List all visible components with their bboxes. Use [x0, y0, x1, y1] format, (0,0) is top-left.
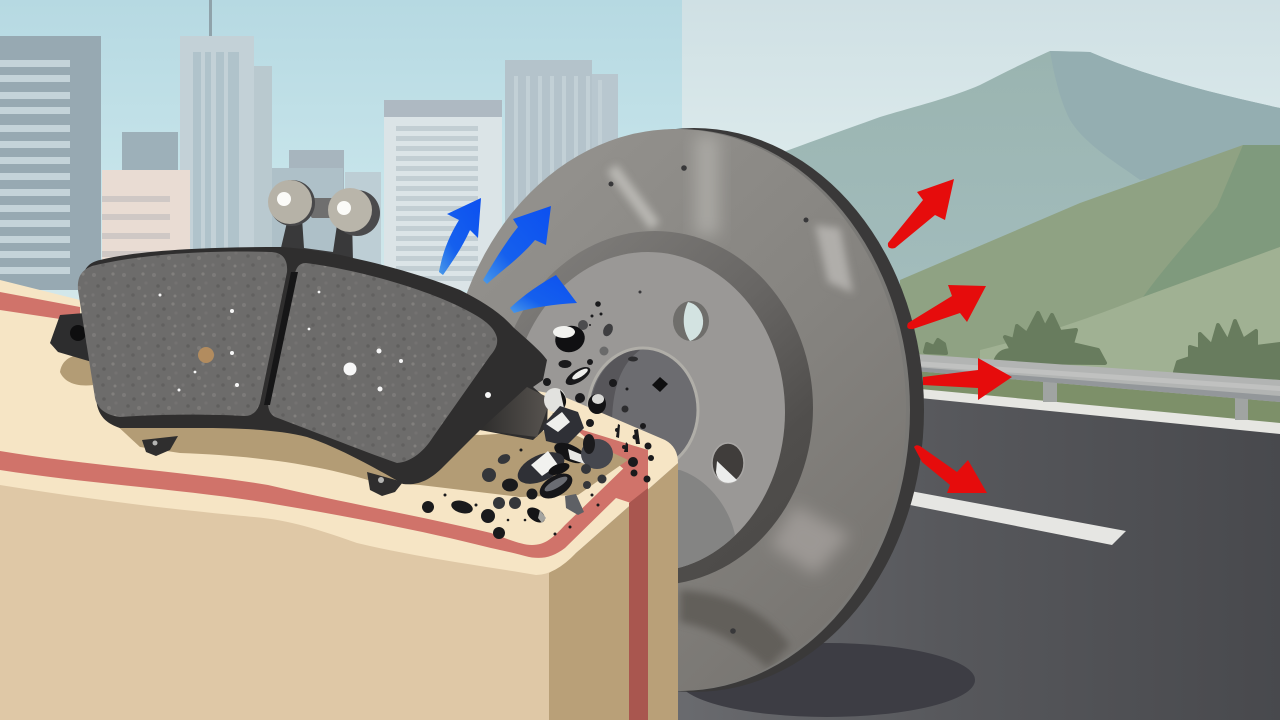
blue arrow 3 [510, 275, 577, 313]
road lane marking [905, 490, 1126, 545]
rotor bevel [450, 129, 910, 691]
box front face [0, 470, 560, 720]
round pebbles [422, 301, 654, 539]
channel between blocks [264, 272, 298, 405]
pad tab bottom right [367, 472, 403, 496]
pad tab right [480, 387, 548, 437]
rotor small holes [608, 165, 808, 634]
disc shadow on road [679, 643, 975, 717]
rotor friction face [446, 129, 906, 691]
bolt hole lower [712, 443, 744, 483]
pad tab bottom left [142, 436, 178, 456]
rotor hub [511, 252, 785, 572]
bolt hole upper [673, 301, 709, 341]
box side face [549, 463, 678, 720]
heat arrows: red [888, 179, 1012, 493]
red arrow 2 [907, 285, 986, 329]
red arrow 3 [923, 358, 1012, 400]
background: roadside bushes [925, 313, 1280, 378]
background: road [670, 385, 1280, 720]
red arrow 1 [888, 179, 954, 248]
cooling arrows: blue [439, 198, 577, 313]
bright specks [158, 291, 491, 398]
black diamond chip on bore [652, 377, 668, 392]
large fragments [513, 322, 613, 526]
blue arrow 2 [483, 206, 551, 284]
copper rivet [198, 347, 214, 363]
debris: crumbled pad fragments [422, 301, 668, 539]
cardboard box [0, 280, 678, 720]
rotor inner groove [497, 231, 813, 585]
tape side band [629, 488, 648, 720]
blue arrow 1 [439, 198, 481, 275]
friction block left [78, 252, 287, 417]
rotor edge [464, 128, 924, 692]
brake pad [50, 180, 548, 496]
center bore [588, 348, 698, 472]
pad left ear [50, 313, 92, 362]
red arrow 4 [914, 445, 987, 493]
pad shadow on box [60, 355, 628, 497]
background: city buildings [0, 0, 618, 290]
guard rail [915, 354, 1280, 420]
tape front band [0, 451, 648, 558]
friction block right [268, 263, 497, 463]
background: mountains [682, 51, 1280, 420]
brake disc rotor [446, 128, 924, 692]
tape rear patch [573, 427, 648, 490]
road edge line [920, 389, 1280, 434]
box top surface [0, 280, 678, 575]
pad studs [268, 180, 380, 262]
tape top band [0, 292, 80, 322]
pad back plate [82, 247, 548, 484]
background: grass under rail [905, 370, 1280, 424]
